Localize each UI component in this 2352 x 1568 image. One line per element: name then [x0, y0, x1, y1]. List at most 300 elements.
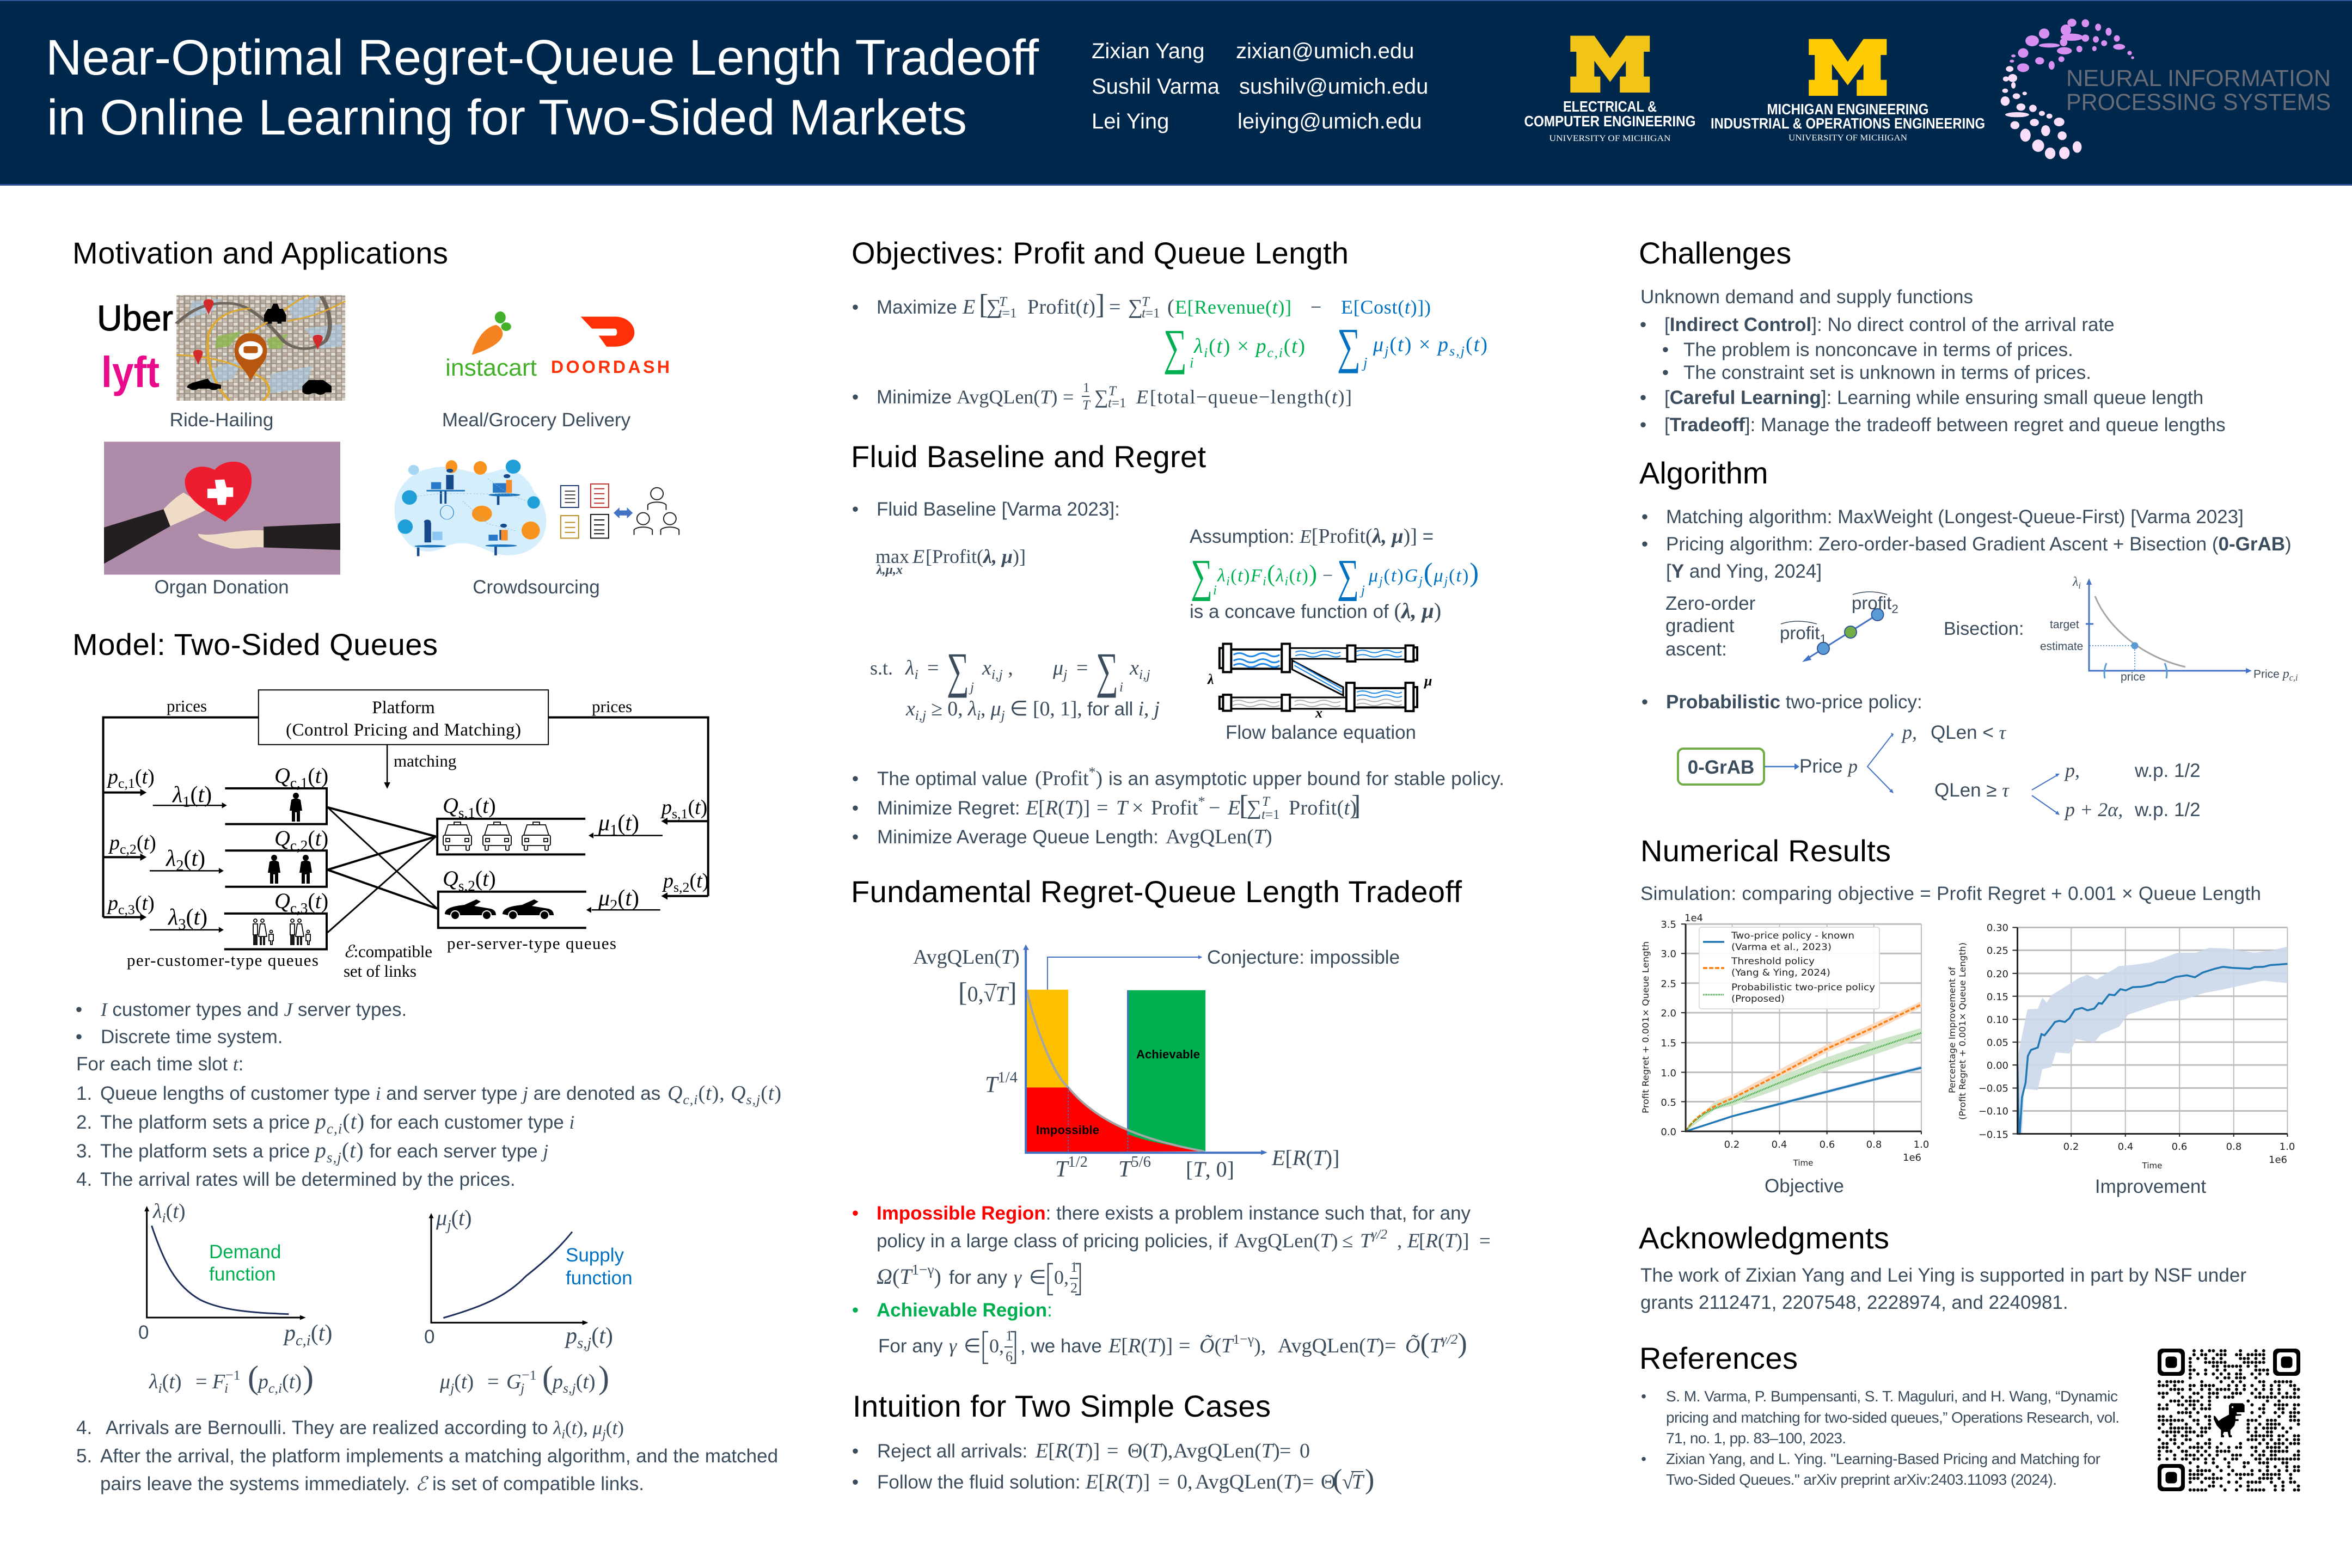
chart: improvement: −0.15: [1979, 1129, 2008, 1141]
chart: objective: [1640, 912, 1929, 1168]
equation: max profit: max: [875, 546, 909, 567]
diagram: two-sided queues: Platform: [372, 698, 435, 718]
logo: Industrial and Operations Engineering: UNIVERSITY OF MICHIGAN: [1788, 133, 1907, 143]
diagram: two-sided queues: [103, 690, 709, 981]
authors: zixian@umich.edu: [1236, 39, 1414, 63]
text: assumption: ∑: [1191, 550, 1212, 602]
chart: regret-queue tradeoff regions: T1/4: [985, 1069, 1018, 1098]
diagram: two-price policy tree: [1765, 721, 2201, 820]
logo: DoorDash: DOORDASH: [551, 357, 670, 377]
chart: improvement: 0.8: [2226, 1141, 2241, 1153]
diagram: two-sided queues: pc,1(t): [106, 765, 155, 791]
formula: inverse demand: i: [224, 1380, 228, 1396]
equation: constraints: xi,j ,: [982, 657, 1013, 682]
chart: bisection: estimate: [2040, 640, 2083, 653]
text: assumption: −: [1322, 566, 1333, 586]
text: reject all arrivals: =: [1279, 1440, 1291, 1462]
chart: regret-queue tradeoff regions: [T, 0]: [1186, 1157, 1234, 1181]
text: algorithm list: Pricing algorithm: Zero-order-based Gradient Ascent + Bisection (0-GrAB): [1666, 534, 2292, 555]
text: achievable region: •: [852, 1300, 859, 1321]
text: impossible region: Impossible Region: there exists a problem instance such that, for any: [877, 1203, 1471, 1224]
text: achievable region: ): [1457, 1328, 1467, 1359]
text: follow the fluid solution: •: [852, 1472, 859, 1493]
equation: constraints: ∑: [1096, 642, 1118, 698]
formula: inverse supply: =: [487, 1370, 499, 1393]
equation: maximize profit: ∑: [1163, 319, 1187, 375]
text: model description: The platform sets a price pc,i(t) for each customer type i: [100, 1109, 574, 1137]
text: algorithm list: •: [1641, 506, 1648, 528]
icon group: clipboards and people: [561, 484, 679, 538]
text: achievable region: Achievable Region:: [877, 1300, 1052, 1321]
chart: improvement: 0.10: [1987, 1014, 2008, 1026]
chart: improvement: Percentage Improvement of: [1947, 967, 1957, 1093]
diagram: two-price policy tree: p + 2α,: [2063, 799, 2123, 820]
diagram: two-sided queues: Qc,3(t): [274, 889, 328, 916]
text: regret definitions: ]: [1351, 790, 1361, 821]
chart: bisection: target: [2050, 618, 2079, 631]
text: assumption: Assumption: E[Profit(λ, μ)] =: [1190, 525, 1434, 548]
text: achievable region: Õ: [1405, 1334, 1420, 1357]
text: reject all arrivals: Reject all arrivals:: [877, 1441, 1027, 1462]
text: arrivals and matching: [76, 1417, 778, 1494]
text: regret definitions: E[R(T)]: [1026, 797, 1090, 819]
text: regret definitions: E: [1227, 797, 1240, 819]
diagram: flow balance pipes: μ: [1423, 673, 1432, 689]
formula: inverse demand: (: [248, 1359, 259, 1395]
logo: NeurIPS: NEURAL INFORMATION: [2066, 65, 2331, 91]
label: bisection: Bisection:: [1944, 618, 2024, 639]
equation: constraints: =: [1076, 657, 1088, 679]
text: achievable region: E[R(T)]: [1108, 1334, 1173, 1357]
chart: demand function: [138, 1200, 332, 1349]
formula: inverse supply: (: [542, 1359, 553, 1395]
diagram: two-sided queues: Qs,2(t): [443, 866, 496, 894]
panel: algorithm: [1639, 456, 2298, 820]
equation: max profit: [Profit(λ, μ)]: [926, 546, 1026, 567]
diagram: flow balance pipes: x: [1315, 705, 1322, 721]
text: regret definitions: T: [1116, 797, 1129, 819]
text: impossible region: E: [1407, 1230, 1420, 1252]
text: reference list: S. M. Varma, P. Bumpensanti, S. T. Maguluri, and H. Wang, “Dynamic: [1666, 1388, 2118, 1405]
heading: fluid baseline: Fluid Baseline and Regret: [851, 439, 1206, 474]
box: 0-GrAB: 0-GrAB: [1688, 757, 1754, 778]
chart: demand function: 0: [138, 1322, 149, 1343]
text: regret definitions: t=1: [1261, 807, 1280, 822]
formula: inverse demand: λi(t): [149, 1370, 182, 1396]
text: follow the fluid solution: E[R(T)]: [1086, 1471, 1150, 1493]
panel: fluid baseline and regret: [851, 439, 1504, 848]
panel: fundamental tradeoff: [851, 874, 1491, 1364]
text: challenges list: Unknown demand and supply functions: [1640, 286, 1973, 308]
text: achievable region: , we have: [1020, 1336, 1102, 1357]
formula: inverse demand: F: [212, 1370, 225, 1393]
panel: challenges: [1639, 236, 2226, 436]
diagram: two-sided queues: matching: [394, 751, 456, 770]
image: crowdsourcing network: [395, 460, 546, 556]
text: assumption: μj(t)Gj(μj(t)): [1368, 557, 1479, 589]
text: model description: The platform sets a price ps,j(t) for each server type j: [100, 1138, 548, 1166]
text: assumption: [1190, 525, 1479, 623]
chart: regret-queue tradeoff regions: Achievable: [1136, 1048, 1200, 1061]
heading: tradeoff: Fundamental Regret-Queue Length Tradeoff: [851, 874, 1462, 909]
text: achievable region: Tγ/2: [1430, 1331, 1457, 1357]
chart: improvement: 1.0: [2280, 1141, 2295, 1153]
chart: objective: 2.0: [1661, 1008, 1676, 1019]
text: zero-order gradient ascent: Zero-order: [1665, 593, 1756, 614]
text: regret definitions: •: [852, 768, 859, 789]
text: regret definitions: Minimize Regret:: [877, 798, 1020, 819]
equation: maximize profit: •: [852, 297, 859, 318]
formula: inverse supply: ): [598, 1359, 609, 1395]
text: reject all arrivals: AvgQLen(T): [1173, 1440, 1280, 1462]
logo: Lyft: lyft: [101, 348, 160, 396]
panel: objectives: [852, 236, 1487, 413]
equation: maximize profit: (: [1167, 296, 1174, 318]
text: challenges list: [Careful Learning]: Learning while ensuring small queue length: [1664, 387, 2203, 408]
text: regret definitions: −: [1209, 797, 1220, 819]
text: challenges list: The constraint set is unknown in terms of prices.: [1683, 362, 2091, 383]
legend: objective chart: [1699, 927, 1879, 1009]
diagram: two-sided queues: Qc,1(t): [274, 763, 328, 791]
chart: demand function: λi(t): [152, 1200, 186, 1226]
equation: maximize profit: Maximize: [877, 297, 957, 318]
text: assumption: i: [1213, 583, 1217, 598]
QR code with dinosaur: [2158, 1349, 2300, 1491]
chart: objective: 3.5: [1661, 919, 1676, 930]
text: model description: The arrival rates will be determined by the prices.: [100, 1169, 516, 1190]
text: impossible region: γ: [1014, 1266, 1022, 1288]
equation: minimize queue length: [852, 381, 1352, 413]
text: zero-order gradient ascent: gradient: [1665, 615, 1735, 636]
text: challenges list: [Tradeoff]: Manage the tradeoff between regret and queue lengths: [1664, 414, 2226, 436]
diagram: gradient ascent: [1780, 592, 1898, 662]
text: arrivals and matching: pairs leave the systems immediately. ℰ is set of compatible links.: [100, 1473, 644, 1494]
text: regret definitions: ×: [1132, 797, 1143, 819]
text: achievable region: 6: [1006, 1349, 1013, 1364]
text: achievable region: =: [1179, 1334, 1190, 1357]
diagram: two-sided queues: (Control Pricing and Matching): [286, 720, 521, 740]
equation: minimize queue length: [total−queue−length(t)]: [1150, 386, 1352, 408]
equation: constraints: j: [969, 680, 974, 695]
text: arrivals and matching: 4.: [76, 1417, 92, 1438]
caption: flow balance equation: Flow balance equation: [1226, 722, 1416, 743]
chart: regret-queue tradeoff regions: Conjecture: impossible: [1207, 947, 1400, 968]
text: impossible region: Tγ/2: [1360, 1227, 1387, 1252]
equation: maximize profit: Profit(t): [1027, 296, 1095, 318]
text: reference list: pricing and matching for two-sided queues,” Operations Research, vol.: [1666, 1409, 2120, 1426]
heading: references: References: [1639, 1341, 1798, 1375]
text: reference list: Zixian Yang, and L. Ying. "Learning-Based Pricing and Matching for: [1666, 1450, 2100, 1467]
text: funding: grants 2112471, 2207548, 2228974, and 2240981.: [1640, 1292, 2068, 1313]
chart: objective: 0.6: [1820, 1139, 1835, 1150]
panel: motivation and applications: [72, 236, 679, 598]
text: achievable region: 0,: [989, 1335, 1004, 1357]
chart: demand function: Demand: [209, 1241, 281, 1263]
equation: minimize queue length: T: [1108, 384, 1117, 399]
chart: objective: 2.5: [1661, 978, 1676, 990]
equation: minimize queue length: T: [1082, 398, 1091, 413]
chart: objective: 1.5: [1661, 1038, 1676, 1049]
text: impossible region: 2: [1070, 1280, 1077, 1296]
heading: objectives: Objectives: Profit and Queue Length: [852, 236, 1349, 270]
text: model description: 2.: [76, 1112, 92, 1133]
text: reference list: 71, no. 1, pp. 83–100, 2023.: [1666, 1430, 1846, 1447]
legend: objective chart: Probabilistic two-price policy: [1731, 982, 1875, 993]
text: regret definitions: •: [852, 798, 859, 819]
equation: maximize profit: λi(t) × pc,i(t): [1193, 335, 1305, 360]
text: probabilistic policy: Probabilistic two-price policy:: [1666, 691, 1922, 713]
text: impossible region: [R(T)]: [1419, 1230, 1469, 1252]
diagram: two-sided queues: prices: [167, 696, 207, 715]
text: reject all arrivals: Θ(T),: [1128, 1440, 1173, 1462]
formula: inverse demand: −1: [225, 1367, 240, 1383]
equation: maximize profit: μj(t) × ps,j(t): [1373, 333, 1487, 359]
legend: objective chart: Threshold policy: [1731, 956, 1815, 967]
equation: maximize profit: T: [1142, 295, 1150, 309]
diagram: gradient ascent: profit1: [1780, 623, 1827, 646]
formula: inverse demand: ): [303, 1359, 314, 1395]
chart: bisection: [2040, 575, 2298, 683]
diagram: gradient ascent: profit2: [1852, 593, 1898, 616]
text: regret definitions: Profit(t): [1289, 797, 1357, 819]
diagram: two-sided queues: pc,3(t): [106, 892, 155, 917]
text: impossible region: ,: [1397, 1230, 1402, 1252]
text: challenges list: •: [1662, 362, 1669, 383]
equation: maximize profit: −: [1310, 296, 1321, 318]
diagram: two-price policy tree: QLen ≥ τ: [1934, 780, 2010, 801]
equation: minimize queue length: •: [852, 387, 859, 408]
text: regret definitions: [852, 764, 1504, 848]
text: reject all arrivals: [852, 1440, 1310, 1462]
text: regret definitions: is an asymptotic upper bound for stable policy.: [1108, 768, 1504, 789]
chart: improvement: Time: [2142, 1161, 2162, 1171]
chart: bisection: Price pc,i: [2253, 667, 2298, 683]
authors: leiying@umich.edu: [1238, 109, 1422, 133]
chart: objective: 0.0: [1661, 1126, 1676, 1138]
text: achievable region: =: [1385, 1334, 1396, 1357]
heading: motivation: Motivation and Applications: [72, 236, 448, 270]
diagram: two-sided queues: ps,2(t): [661, 869, 709, 895]
text: impossible region: [852, 1203, 1491, 1296]
text: follow the fluid solution: (: [1333, 1464, 1342, 1495]
heading: model: Model: Two-Sided Queues: [72, 627, 438, 661]
legend: objective chart: (Yang & Ying, 2024): [1731, 967, 1830, 978]
image: organ donation: [104, 442, 340, 575]
chart: improvement: 0.25: [1987, 945, 2008, 957]
text: follow the fluid solution: ): [1365, 1464, 1374, 1495]
chart: regret-queue tradeoff regions: Impossible: [1036, 1123, 1099, 1137]
diagram: two-sided queues: μ2(t): [598, 886, 639, 914]
chart: improvement: 0.15: [1987, 991, 2008, 1003]
chart: objective: 1.0: [1661, 1068, 1676, 1079]
text: model description: Queue lengths of customer type i and server type j are denoted as: [100, 1083, 660, 1104]
equation: maximize profit: t=1: [999, 306, 1017, 321]
equation: maximize profit: =: [1109, 296, 1120, 318]
diagram: two-sided queues: per-server-type queues: [447, 934, 616, 953]
logo: Instacart: [445, 311, 537, 381]
text: achievable region: ∈: [964, 1335, 981, 1357]
authors: sushilv@umich.edu: [1239, 75, 1428, 99]
diagram: two-sided queues: λ2(t): [165, 846, 205, 874]
logo: Uber: Uber: [97, 298, 173, 338]
heading: numerical results: Numerical Results: [1640, 834, 1891, 868]
chart: improvement: 0.20: [1987, 969, 2008, 980]
formula: inverse demand: =: [195, 1370, 207, 1393]
chart: regret-queue tradeoff regions: T1/2: [1055, 1154, 1088, 1182]
text: challenges list: •: [1640, 387, 1646, 408]
diagram: two-sided queues: Qc,2(t): [274, 826, 328, 854]
text: reference list: •: [1641, 1450, 1646, 1467]
text: model description: Discrete time system.: [101, 1026, 283, 1048]
formula: inverse supply: μj(t): [440, 1370, 474, 1396]
chart: improvement: 0.05: [1987, 1037, 2008, 1049]
text: regret definitions: Minimize Average Queue Length:: [877, 826, 1159, 848]
logo: Industrial and Operations Engineering: MICHIGAN ENGINEERING: [1767, 101, 1928, 118]
equation: maximize profit: t=1: [1142, 306, 1160, 321]
text: model description: 3.: [76, 1141, 92, 1162]
chart: improvement: 0.2: [2063, 1141, 2079, 1153]
text: challenges list: •: [1662, 339, 1669, 360]
chart: demand function: function: [209, 1264, 276, 1285]
authors: Lei Ying: [1092, 109, 1169, 133]
logo: Electrical and Computer Engineering: ELECTRICAL &: [1563, 98, 1657, 115]
diagram: two-sided queues: ℰ:compatible: [344, 942, 432, 961]
equation: maximize profit: i: [1190, 354, 1194, 371]
chart: supply function: function: [566, 1267, 633, 1289]
equation: minimize queue length: AvgQLen(T): [957, 386, 1057, 408]
panel: references: [1639, 1341, 2300, 1491]
text: probabilistic policy: •: [1641, 691, 1648, 713]
equation: constraints: ∑: [947, 642, 969, 698]
chart: improvement: 0.00: [1987, 1060, 2008, 1071]
text: model description: •: [76, 999, 82, 1020]
text: achievable region: γ: [949, 1335, 957, 1357]
diagram: two-sided queues: Qs,1(t): [443, 793, 496, 821]
text: impossible region: 1: [1070, 1259, 1077, 1275]
formula: inverse supply: −1: [522, 1367, 536, 1383]
title: [46, 30, 1039, 145]
equation: minimize queue length: ∑: [1094, 386, 1108, 408]
title: Near-Optimal Regret-Queue Length Tradeoff: [46, 30, 1039, 85]
text: arrivals and matching: After the arrival, the platform implements a matching algorithm, and the matched: [100, 1445, 778, 1467]
chart: regret-queue tradeoff regions: AvgQLen(T): [913, 946, 1020, 969]
caption: ride-hailing: Ride-Hailing: [170, 409, 273, 431]
chart: objective: Profit Regret + 0.001× Queue Length: [1640, 941, 1651, 1113]
logo: Industrial and Operations Engineering: [1711, 39, 1985, 143]
chart: bisection: price: [2121, 671, 2146, 683]
text: follow the fluid solution: 0,: [1177, 1471, 1192, 1493]
chart: regret-queue tradeoff regions: [0,√T]: [958, 977, 1017, 1007]
text: achievable region: AvgQLen(T): [1278, 1334, 1385, 1357]
text: follow the fluid solution: =: [1158, 1471, 1169, 1493]
equation: minimize queue length: Minimize: [877, 387, 952, 408]
text: reject all arrivals: 0: [1300, 1440, 1310, 1462]
diagram: two-price policy tree: QLen < τ: [1931, 722, 2007, 743]
chart: improvement: [1947, 922, 2295, 1171]
chart: supply function: [424, 1205, 633, 1352]
chart: bisection: λi: [2072, 575, 2081, 591]
box: 0-GrAB: [1678, 749, 1764, 785]
formula: inverse supply: j: [519, 1380, 524, 1396]
panel: model two-sided queues: [72, 627, 781, 1494]
chart: improvement: 1e6: [2269, 1154, 2287, 1166]
title: in Online Learning for Two-Sided Markets: [47, 90, 967, 145]
text: funding: The work of Zixian Yang and Lei Ying is supported in part by NSF under: [1640, 1265, 2246, 1286]
text: achievable region: (T1−γ),: [1214, 1331, 1266, 1357]
equation: maximize profit: ∑: [987, 296, 1001, 318]
image: ride-hailing map: [176, 295, 345, 401]
equation: constraints: s.t.: [870, 657, 893, 679]
chart: improvement: 0.4: [2118, 1141, 2133, 1153]
formula: inverse supply: G: [506, 1370, 521, 1393]
text: model description: •: [76, 1026, 82, 1048]
text: regret definitions: (Profit*): [1035, 764, 1102, 790]
text: achievable region: (: [1420, 1328, 1430, 1359]
equation: maximize profit: ]: [1095, 289, 1105, 320]
chart: objective: 0.5: [1661, 1097, 1676, 1108]
text: impossible region: policy in a large class of pricing policies, if: [877, 1230, 1228, 1252]
chart: supply function: Supply: [566, 1245, 624, 1266]
panel: acknowledgments: [1639, 1221, 2246, 1313]
text: fluid baseline label: •: [852, 499, 859, 520]
chart: improvement: 0.6: [2172, 1141, 2187, 1153]
equation: maximize profit: [: [979, 289, 988, 320]
text: follow the fluid solution: Θ: [1321, 1471, 1336, 1493]
text: reject all arrivals: =: [1107, 1440, 1118, 1462]
chart: objective: Time: [1793, 1158, 1813, 1168]
text: impossible region: •: [852, 1203, 859, 1224]
text: impossible region: AvgQLen(T): [1234, 1230, 1338, 1252]
text: reference list: [1641, 1388, 2120, 1488]
formula: inverse supply: ps,j: [553, 1370, 576, 1396]
diagram: two-sided queues: μ1(t): [598, 811, 639, 839]
caption: crowdsourcing: Crowdsourcing: [473, 577, 600, 598]
text: algorithm list: [Y and Ying, 2024]: [1666, 561, 1822, 582]
text: model description: 4.: [76, 1169, 92, 1190]
text: challenges list: [1640, 286, 2226, 436]
text: achievable region: For any: [878, 1336, 943, 1357]
equation: constraints: λi: [905, 657, 918, 682]
diagram: flow balance pipes: λ: [1207, 671, 1214, 687]
text: challenges list: •: [1640, 414, 1646, 436]
text: achievable region: [852, 1300, 1467, 1364]
caption: organ donation: Organ Donation: [154, 577, 289, 598]
equation: maximize profit: j: [1362, 354, 1368, 371]
text: achievable region: Õ: [1199, 1334, 1214, 1357]
equation: constraints: =: [927, 657, 939, 679]
text: zero-order gradient ascent: [1665, 593, 1756, 660]
equation: maximize profit: E: [962, 296, 975, 318]
text: assumption: j: [1359, 583, 1365, 598]
text: regret definitions: [: [1239, 790, 1248, 821]
text: follow the fluid solution: AvgQLen(T): [1195, 1471, 1302, 1493]
text: reject all arrivals: E[R(T)]: [1036, 1440, 1100, 1462]
text: regret definitions: •: [852, 826, 859, 848]
equation: max profit: [875, 546, 1026, 577]
diagram: two-price policy tree: w.p. 1/2: [2134, 760, 2201, 781]
equation: constraints: xi,j: [1129, 657, 1150, 682]
chart: supply function: ps,j(t): [564, 1324, 613, 1352]
equation: maximize profit: E[Revenue(t)]: [1175, 296, 1291, 318]
logo: Electrical and Computer Engineering: UNIVERSITY OF MICHIGAN: [1549, 134, 1671, 143]
chart: objective: 0.2: [1724, 1139, 1739, 1150]
logo: NeurIPS: PROCESSING SYSTEMS: [2066, 89, 2331, 115]
chart: supply function: μj(t): [436, 1205, 471, 1233]
logo: Instacart: instacart: [445, 354, 537, 381]
text: zero-order gradient ascent: ascent:: [1665, 639, 1727, 660]
formula: inverse supply: (t): [576, 1370, 596, 1393]
diagram: two-sided queues: per-customer-type queues: [127, 951, 318, 970]
